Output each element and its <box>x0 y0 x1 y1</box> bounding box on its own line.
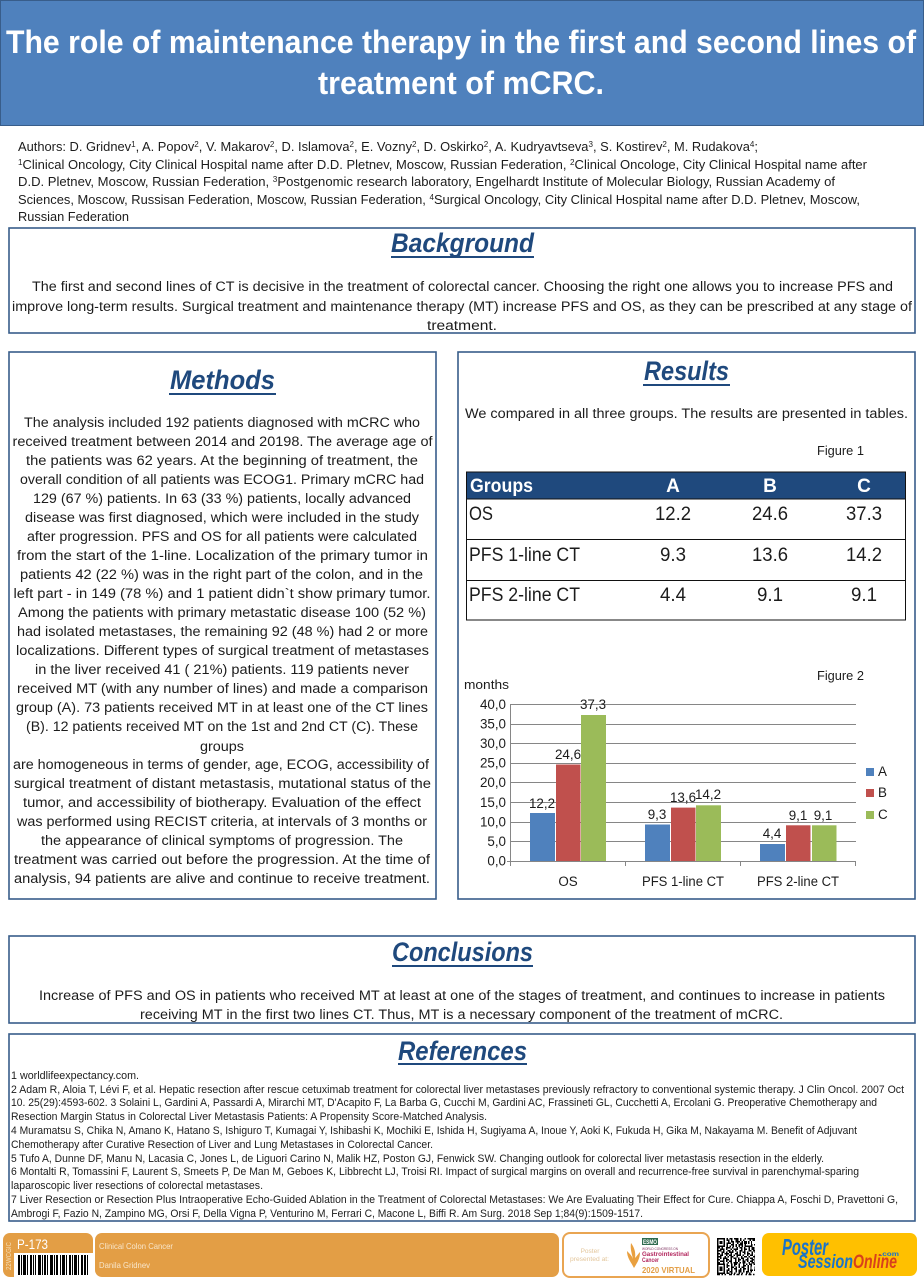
panel: conclusions <box>9 936 915 1023</box>
panel: results <box>458 352 915 899</box>
authors and affiliations: 4 <box>429 193 435 202</box>
methods text: had isolated metastases, the remaining 92 (48 %) had 2 or more <box>17 624 428 640</box>
bar chart: months by group: OS <box>558 874 578 889</box>
reference list: 7 Liver Resection or Resection Plus Intraoperative Echo-Guided Ablation in the Treatment of Colorectal Metastases: We Are Evaluating Their Effect for Cure. Chiappa A, Foschi D, Pravettoni G, <box>11 1194 898 1206</box>
results table: 9.1 <box>757 585 783 606</box>
results table: 4.4 <box>660 585 686 606</box>
bar chart: months by group: 37,3 <box>580 697 606 712</box>
authors and affiliations: 4 <box>750 140 755 149</box>
footer: poster id tab with barcode: P-173 <box>17 1236 48 1252</box>
reference list: 2 Adam R, Aloia T, Lévi F, et al. Hepatic resection after rescue cetuximab treatment for colorectal liver metastases previously refractory to conventional systemic therapy. J Clin Oncol. 2007 Oct <box>11 1084 904 1096</box>
reference list: 6 Montalti R, Tomassini F, Laurent S, Smeets P, De Man M, Geboes K, Libbrecht LJ, Troisi RI. Impact of surgical margins on overall and recurrence-free survival in parenchymal-sparing <box>11 1166 859 1178</box>
authors and affiliations: 1 <box>131 140 136 149</box>
chart legend: B <box>878 785 887 800</box>
methods text: left part - in 149 (78 %) and 1 patient didn`t show primary tumor. <box>14 586 430 602</box>
footer: PosterSessionOnline logo: .com <box>880 1251 899 1258</box>
footer: congress badge: Gastrointestinal <box>642 1251 689 1258</box>
methods text: surgical treatment of distant metastasis, mutational status of the <box>14 776 431 792</box>
footer: congress badge <box>563 1233 709 1277</box>
footer: PosterSessionOnline logo: Session <box>798 1252 853 1273</box>
footer: PosterSessionOnline logo: Poster <box>782 1234 829 1260</box>
results table: PFS 1-line CT <box>469 545 580 566</box>
results table: OS <box>469 504 493 525</box>
figure 2 caption: Figure 2 <box>817 669 864 683</box>
bar chart: months by group: 40,0 <box>480 697 506 712</box>
bar chart: months by group: 9,1 <box>789 808 807 823</box>
results intro text: We compared in all three groups. The results are presented in tables. <box>465 406 908 422</box>
results table: 14.2 <box>846 545 882 566</box>
results table: 9.1 <box>851 585 877 606</box>
authors and affiliations <box>18 139 868 224</box>
bar chart: months by group: 25,0 <box>480 756 506 770</box>
methods text: groups <box>200 739 244 755</box>
results table <box>466 472 906 620</box>
methods text: patients 42 (22 %) was in the right part of the colon, and in the <box>20 567 423 583</box>
authors and affiliations: , V. Makarov <box>199 139 270 154</box>
icon: wheat <box>627 1243 640 1268</box>
results table: Groups <box>470 476 533 497</box>
title banner: treatment of mCRC. <box>318 65 604 101</box>
bar chart: months by group: PFS 2-line CT <box>757 874 839 889</box>
results table: A <box>666 476 680 497</box>
methods text: in the liver received 41 ( 21%) patients. 119 patients never <box>35 662 409 678</box>
background text: The first and second lines of CT is decisive in the treatment of colorectal cancer. Choosing the right one allows you to increase PFS and <box>32 279 893 295</box>
bar chart: months by group: 5,0 <box>487 834 506 849</box>
authors and affiliations: 2 <box>570 158 575 167</box>
footer: PosterSessionOnline logo: Online <box>853 1252 897 1273</box>
conclusions text: receiving MT in the first two lines CT. Thus, MT is a necessary component of the treatment of mCRC. <box>140 1007 783 1023</box>
chart legend: C <box>878 807 888 822</box>
footer: congress badge: ESMO <box>643 1240 657 1246</box>
footer: topic and author bar: Danila Gridnev <box>99 1260 151 1270</box>
bar chart: months by group: 20,0 <box>480 775 506 790</box>
methods text: after progression. PFS and OS for all patients were calculated <box>27 529 417 545</box>
bar chart: months by group: 9,1 <box>814 808 832 823</box>
footer: PosterSessionOnline logo <box>762 1233 917 1276</box>
footer: congress badge: Poster <box>581 1248 600 1255</box>
footer: topic and author bar: Clinical Colon Cancer <box>99 1241 173 1251</box>
authors and affiliations: , S. Kostirev <box>593 139 663 154</box>
authors and affiliations: 2 <box>194 140 199 149</box>
methods text <box>12 415 433 887</box>
conclusions text: Increase of PFS and OS in patients who received MT at least at one of the stages of treatment, and continues to increase in patients <box>39 988 885 1004</box>
authors and affiliations: 2 <box>484 140 489 149</box>
authors and affiliations: Postgenomic research laboratory, Engelhardt Institute of Molecular Biology, Russian Academy of <box>277 174 835 189</box>
bar chart: months by group: 14,2 <box>695 787 721 802</box>
authors and affiliations: Clinical Oncology, City Clinical Hospital name after D.D. Pletnev, Moscow, Russian Federation, <box>23 157 570 172</box>
methods text: analysis, 94 patients are alive and continue to receive treatment. <box>14 871 430 887</box>
results table: 37.3 <box>846 504 882 525</box>
reference list: Resection Margin Status in Colorectal Liver Metastasis Patients: A Propensity Score-Matched Analysis. <box>11 1111 487 1123</box>
authors and affiliations: Sciences, Moscow, Russisan Federation, Moscow, Russian Federation, <box>18 192 423 207</box>
methods text: are homogeneous in terms of gender, age, ECOG, accessibility of <box>13 757 429 773</box>
chart legend: A <box>878 764 887 779</box>
authors and affiliations: , D. Islamova <box>274 139 350 154</box>
authors and affiliations: Authors: D. Gridnev <box>18 139 130 154</box>
bar chart: months by group: 15,0 <box>480 795 506 810</box>
authors and affiliations: 3 <box>273 175 278 184</box>
reference list: 4 Muramatsu S, Chika N, Amano K, Hatano S, Ishiguro T, Kumagai Y, Ishibashi K, Mochiki E, Ishida H, Sugiyama A, Inoue Y, Aoki K, Fukuda H, Gika M, Nakayama M. Benefit of Adjuvant <box>11 1125 857 1137</box>
results table: 13.6 <box>752 545 788 566</box>
methods text: the patients was 62 years. At the beginning of treatment, the <box>26 453 418 469</box>
footer: congress badge: Cancer <box>642 1257 659 1264</box>
heading: results: Results <box>644 356 729 386</box>
authors and affiliations: 2 <box>662 140 667 149</box>
authors and affiliations: 2 <box>270 140 275 149</box>
bar chart: months by group: 4,4 <box>763 826 782 841</box>
results table: PFS 2-line CT <box>469 585 580 606</box>
results table: 12.2 <box>655 504 691 525</box>
results table: B <box>763 476 777 497</box>
methods text: Among the patients with primary metastatic disease 100 (52 %) <box>18 605 426 621</box>
authors and affiliations: , M. Rudakova <box>667 139 751 154</box>
methods text: received treatment between 2014 and 20198. The average age of <box>12 434 433 450</box>
reference list: 5 Tufo A, Dunne DF, Manu N, Lacasia C, Jones L, de Liguori Carino N, Malik HZ, Poston GJ, Fenwick SW. Changing outlook for colorectal liver metastasis resection in the elderly. <box>11 1153 824 1165</box>
authors and affiliations: 2 <box>350 140 355 149</box>
authors and affiliations: , A. Popov <box>136 139 195 154</box>
authors and affiliations: , E. Vozny <box>354 139 413 154</box>
title banner <box>0 0 924 126</box>
authors and affiliations: Russian Federation <box>18 209 129 224</box>
reference list: 10. 25(29):4593-602. 3 Solaini L, Gardini A, Passardi A, Mirarchi MT, D'Acapito F, La Barba G, Cucchi M, Gardini AC, Frassineti GL, Cucchetti A, Ercolani G. Preoperative Chemotherapy and <box>11 1097 877 1109</box>
bar chart: months by group: PFS 1-line CT <box>642 874 724 889</box>
footer: poster id tab with barcode: 22WCGIC <box>6 1242 13 1270</box>
methods text: the appearance of clinical symptoms of progression. The <box>41 833 403 849</box>
conclusions text <box>39 988 885 1023</box>
bar chart: months by group: 10,0 <box>480 814 506 830</box>
reference list: laparoscopic liver resections of colorectal metastases. <box>11 1180 263 1192</box>
methods text: The analysis included 192 patients diagnosed with mCRC who <box>24 415 420 431</box>
methods text: overall condition of all patients was ECOG1. Primary mCRC had <box>20 472 424 488</box>
authors and affiliations: 3 <box>588 140 594 149</box>
authors and affiliations: ; <box>754 139 758 154</box>
bar chart: months by group: 12,2 <box>529 796 555 811</box>
reference list: Ambrogi F, Fazio N, Zampino MG, Orsi F, Della Vigna P, Venturino M, Ferrari C, Macone L, Biffi R. Am Surg. 2018 Sep 1;84(9):1509-1517. <box>11 1208 643 1220</box>
background text: treatment. <box>427 318 497 334</box>
results table: 24.6 <box>752 504 788 525</box>
bar chart: months by group: 35,0 <box>480 716 506 732</box>
heading: methods: Methods <box>170 365 275 395</box>
panel: methods <box>9 352 436 899</box>
heading: background: Background <box>391 228 534 258</box>
authors and affiliations: , D. Oskirko <box>416 139 484 154</box>
heading: references: References <box>398 1036 527 1066</box>
methods text: group (A). 73 patients received MT in at least one of the CT lines <box>16 700 428 716</box>
authors and affiliations: Surgical Oncology, City Clinical Hospital name after D.D. Pletnev, Moscow, <box>434 192 860 207</box>
footer: congress badge: 2020 VIRTUAL <box>642 1265 695 1275</box>
reference list <box>11 1070 904 1220</box>
methods text: 129 (67 %) patients. In 63 (33 %) patients, locally advanced <box>33 491 411 507</box>
footer: poster id tab with barcode <box>3 1233 93 1277</box>
bar chart: months by group: 24,6 <box>555 747 581 762</box>
bar chart: months by group: 0,0 <box>487 854 506 868</box>
panel: references <box>9 1034 915 1221</box>
bar chart: months by group: months <box>464 677 510 692</box>
footer: topic and author bar <box>95 1233 559 1277</box>
bar chart: months by group: 30,0 <box>480 736 506 751</box>
reference list: Chemotherapy after Curative Resection of Liver and Lung Metastases in Colorectal Cancer. <box>11 1139 433 1151</box>
methods text: received MT (with any number of lines) and made a comparison <box>17 681 428 697</box>
panel: background <box>9 228 915 334</box>
methods text: tumor, and accessibility of biotherapy. Evaluation of the effect <box>23 795 421 811</box>
chart legend <box>866 764 888 822</box>
results table: 9.3 <box>660 545 686 566</box>
results table: C <box>857 476 871 497</box>
methods text: disease was first diagnosed, which were included in the study <box>25 510 420 526</box>
reference list: 1 worldlifeexpectancy.com. <box>11 1070 139 1082</box>
heading: conclusions: Conclusions <box>392 937 533 967</box>
methods text: localizations. Different types of surgical treatment of metastases <box>16 643 429 659</box>
authors and affiliations: , A. Kudryavtseva <box>488 139 589 154</box>
bar chart: months by group: 9,3 <box>648 807 666 822</box>
authors and affiliations: D.D. Pletnev, Moscow, Russian Federation, <box>18 174 264 189</box>
methods text: treatment was carried out before the progression. At the time of <box>14 852 430 868</box>
background text <box>12 279 912 334</box>
footer: QR code <box>717 1238 755 1275</box>
background text: improve long-term results. Surgical treatment and maintenance therapy (MT) increase PFS and OS, as they can be prescribed at any stage of <box>12 299 912 315</box>
methods text: from the start of the 1-line. Localization of the primary tumor in <box>17 548 428 564</box>
methods text: (B). 12 patients received MT on the 1st and 2nd CT (C). These <box>26 719 418 735</box>
figure 1 caption: Figure 1 <box>817 444 864 458</box>
footer: congress badge: WORLD CONGRESS ON <box>642 1247 678 1251</box>
authors and affiliations: Clinical Oncologe, City Clinical Hospital name after <box>575 157 868 172</box>
bar chart: months by group: 13,6 <box>670 790 696 805</box>
footer: congress badge: presented at: <box>570 1256 609 1263</box>
bar chart: months by group <box>464 677 888 889</box>
authors and affiliations: 1 <box>18 158 23 167</box>
methods text: was performed using RECIST criteria, at intervals of 3 months or <box>16 814 427 830</box>
authors and affiliations: 2 <box>412 140 417 149</box>
